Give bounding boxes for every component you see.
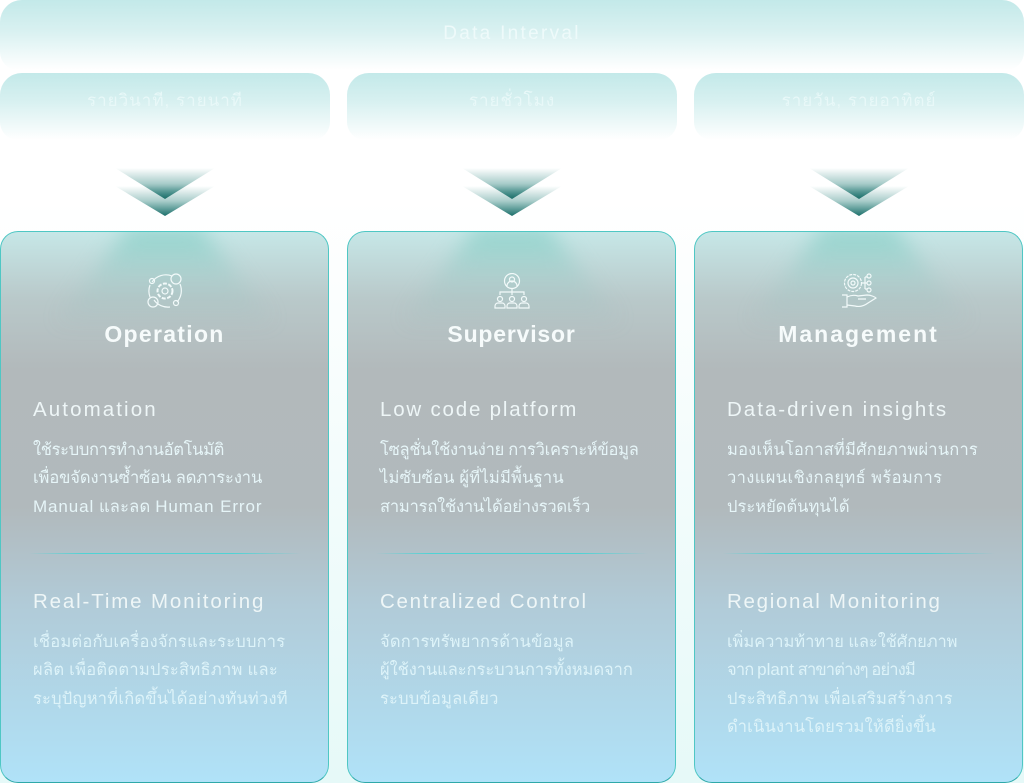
text: centralized description: ผู้ใช้งานและกระบวนการทั้งหมดจาก — [380, 661, 633, 679]
arrow: first column — [118, 170, 212, 216]
text: automation description: ใช้ระบบการทำงานอัตโนมัติ — [33, 441, 224, 459]
text: automation description: เพื่อขจัดงานซ้ำซ้อน ลดภาระงาน — [33, 469, 262, 487]
band: per second and minute: รายวินาที, รายนาที — [87, 91, 243, 110]
text: regional description: จาก plant สาขาต่างๆ อย่างมี — [727, 660, 915, 679]
text: monitoring description: เชื่อมต่อกับเครื่องจักรและระบบการ — [33, 633, 285, 651]
heading: Management: Management — [778, 321, 939, 347]
text: insights description: มองเห็นโอกาสที่มีศักยภาพผ่านการ — [727, 441, 978, 459]
text: automation description — [33, 440, 262, 516]
text: centralized description — [380, 633, 633, 708]
icon: gear network over hand — [842, 273, 877, 308]
text: low code description: โซลูชั่นใช้งานง่าย การวิเคราะห์ข้อมูล — [380, 441, 639, 459]
text: monitoring description: ผลิต เพื่อติดตามประสิทธิภาพ และ — [33, 661, 278, 679]
text: insights description: วางแผนเชิงกลยุทธ์ พร้อมการ — [727, 469, 942, 487]
text: low code description: ไม่ซับซ้อน ผู้ที่ไม่มีพื้นฐาน — [380, 469, 564, 487]
subheading: Automation: Automation — [33, 398, 158, 421]
band: hourly — [347, 73, 677, 140]
arrow: third column — [812, 170, 906, 216]
band: Data Interval — [0, 0, 1024, 70]
subheading: Centralized Control: Centralized Control — [380, 590, 588, 613]
text: regional description: ดำเนินงานโดยรวมให้ดียิ่งขึ้น — [727, 718, 936, 736]
subheading: Data-driven insights: Data-driven insights — [727, 398, 948, 421]
heading: Supervisor: Supervisor — [447, 321, 576, 347]
band: per second and minute — [0, 73, 330, 140]
band: hourly: รายชั่วโมง — [469, 91, 555, 110]
text: regional description: ประสิทธิภาพ เพื่อเสริมสร้างการ — [727, 690, 953, 708]
text: regional description: เพิ่มความท้าทาย และใช้ศักยภาพ — [727, 633, 957, 651]
subheading: Regional Monitoring: Regional Monitoring — [727, 590, 942, 613]
panel: Management — [694, 231, 1023, 783]
heading: Operation: Operation — [104, 321, 225, 347]
text: monitoring description — [33, 630, 288, 708]
subheading: Low code platform: Low code platform — [380, 398, 578, 421]
text: insights description — [727, 438, 978, 516]
panel: Supervisor — [347, 231, 676, 783]
subheading: Real-Time Monitoring: Real-Time Monitoring — [33, 590, 265, 613]
text: low code description — [379, 438, 639, 516]
icon: org chart people — [494, 273, 530, 309]
band: daily and weekly — [694, 73, 1024, 140]
text: monitoring description: ระบุปัญหาที่เกิดขึ้นได้อย่างทันท่วงที — [33, 690, 288, 708]
band: daily and weekly: รายวัน, รายอาทิตย์ — [782, 91, 936, 110]
text: low code description: สามารถใช้งานได้อย่างรวดเร็ว — [380, 498, 590, 516]
text: centralized description: ระบบข้อมูลเดียว — [380, 690, 499, 708]
text: centralized description: จัดการทรัพยากรด้านข้อมูล — [380, 633, 574, 651]
text: automation description: Manual และลด Human Error — [33, 497, 262, 516]
band: Data Interval: Data Interval — [443, 23, 581, 44]
panel: Operation — [0, 231, 329, 783]
icon: gear with checks — [147, 273, 182, 308]
arrow: second column — [465, 170, 559, 216]
text: regional description — [727, 630, 957, 736]
text: insights description: ประหยัดต้นทุนได้ — [727, 498, 850, 516]
